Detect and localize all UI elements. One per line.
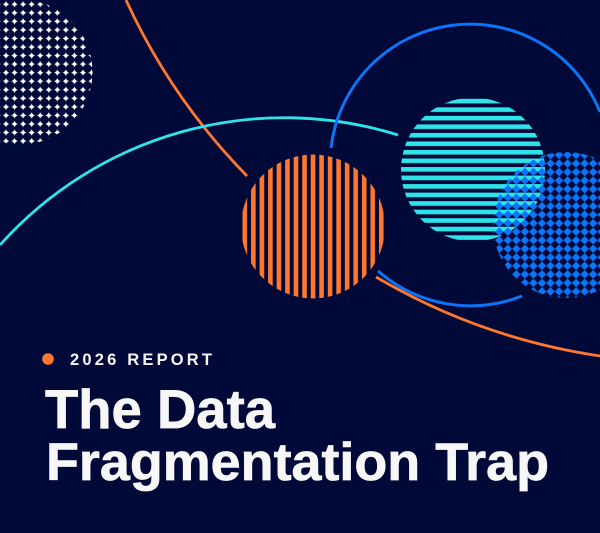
arc: orange upper <box>126 0 247 176</box>
circle: blue diamond checker <box>493 152 600 298</box>
circle: orange vertical stripes <box>241 154 385 298</box>
circle: white star dot grid <box>0 0 92 144</box>
arc: orange lower <box>376 277 600 356</box>
title line 1: The Data <box>45 379 276 440</box>
title <box>45 379 549 492</box>
arc: blue lower <box>378 271 522 306</box>
circle: cyan horizontal stripes <box>401 98 545 242</box>
eyebrow text: 2026 REPORT <box>70 351 212 369</box>
eyebrow: 2026 report <box>42 351 212 369</box>
icon: orange dot <box>42 353 54 365</box>
arc: cyan <box>0 118 398 245</box>
title line 2: Fragmentation Trap <box>46 433 549 492</box>
arc: blue upper <box>331 24 600 148</box>
